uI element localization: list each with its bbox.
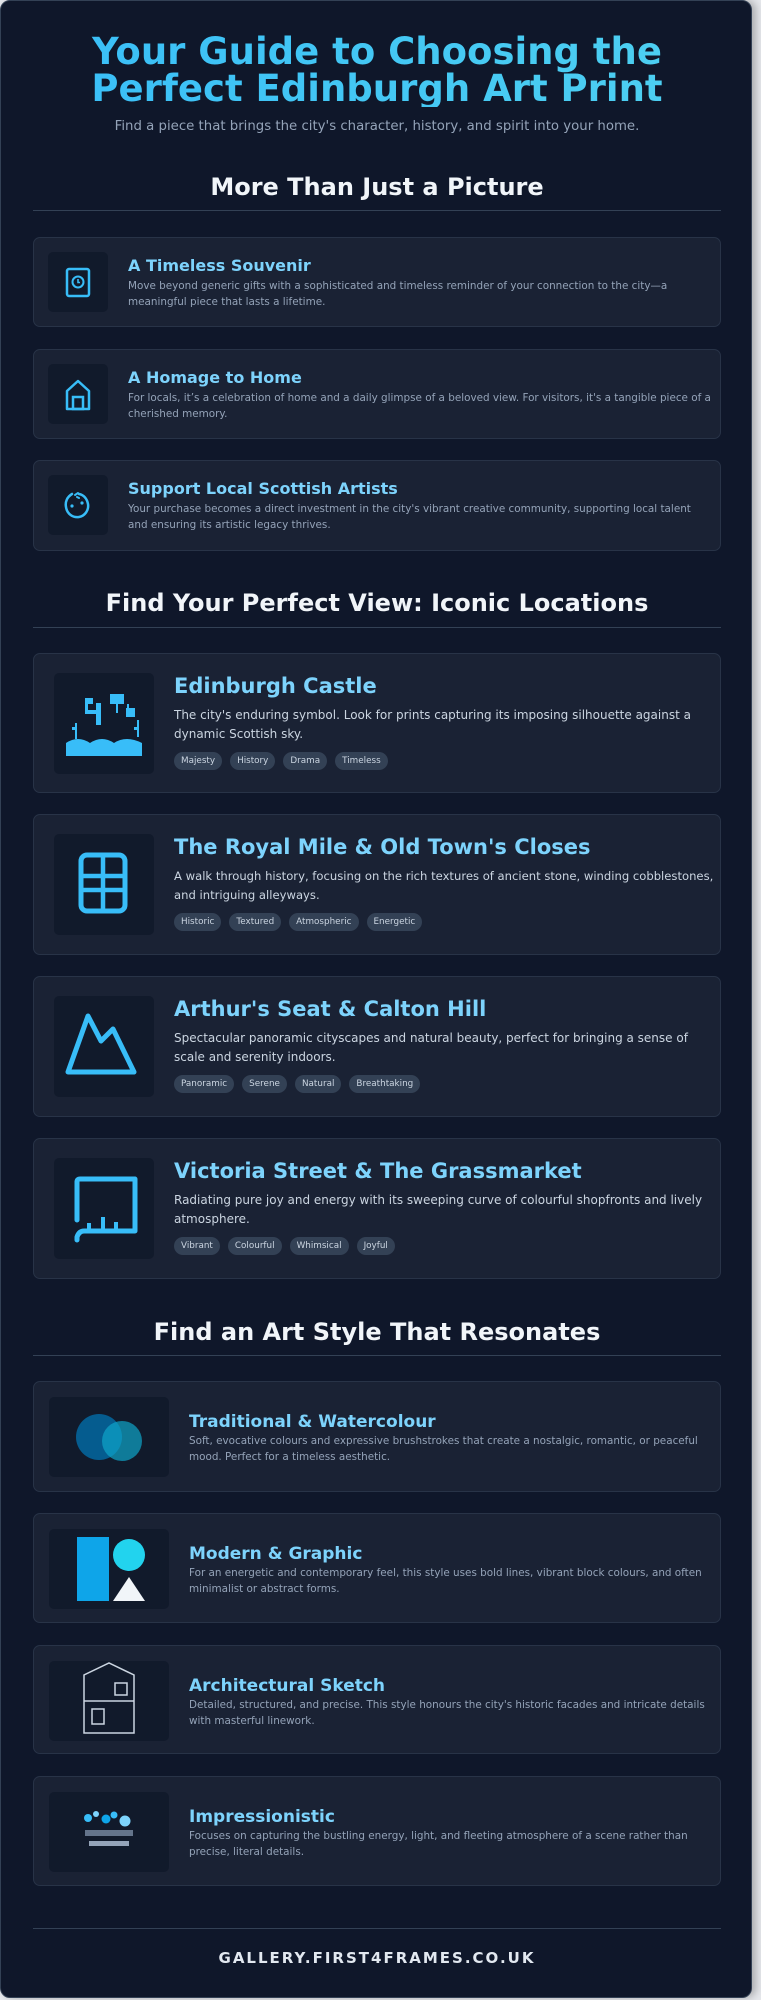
- tags: Textured: [236, 917, 274, 927]
- icon: window grid: [54, 834, 154, 935]
- description: The city's enduring symbol. Look for prints capturing its imposing silhouette against a dynamic Scottish sky.: [174, 708, 691, 741]
- icon: shapes: [49, 1529, 169, 1609]
- title: Your Guide to Choosing the: [92, 30, 662, 73]
- footer: GALLERY.FIRST4FRAMES.CO.UK: [219, 1949, 535, 1967]
- heading: Edinburgh Castle: [174, 674, 377, 698]
- icon: mountain: [54, 996, 154, 1097]
- icon: clock frame: [48, 252, 108, 312]
- tags: [174, 913, 422, 931]
- heading: The Royal Mile & Old Town's Closes: [174, 835, 590, 859]
- description: Your purchase becomes a direct investment in the city's vibrant creative community, supporting local talent and ensuring its artistic legacy thrives.: [128, 503, 691, 531]
- tags: [174, 752, 388, 770]
- description: A walk through history, focusing on the rich textures of ancient stone, winding cobblestones, and intriguing alleyways.: [174, 869, 713, 902]
- panel: architectural sketch: [33, 1645, 721, 1754]
- tags: Colourful: [235, 1241, 275, 1251]
- tags: Vibrant: [181, 1241, 213, 1251]
- description: Focuses on capturing the bustling energy, light, and fleeting atmosphere of a scene rather than precise, literal details.: [189, 1830, 688, 1858]
- heading: Arthur's Seat & Calton Hill: [174, 997, 486, 1021]
- description: Radiating pure joy and energy with its sweeping curve of colourful shopfronts and lively atmosphere.: [174, 1193, 702, 1226]
- panel: arthur's seat: [33, 976, 721, 1117]
- description: Move beyond generic gifts with a sophisticated and timeless reminder of your connection to the city—a meaningful piece that lasts a lifetime.: [128, 280, 667, 308]
- icon: overlapping circles: [49, 1397, 169, 1477]
- subtitle: Find a piece that brings the city's character, history, and spirit into your home.: [115, 119, 639, 134]
- tags: Whimsical: [297, 1241, 342, 1251]
- title: Perfect Edinburgh Art Print: [91, 67, 663, 110]
- tags: Atmospheric: [296, 917, 352, 927]
- description: For an energetic and contemporary feel, this style uses bold lines, vibrant block colours, and often minimalist or abstract forms.: [189, 1567, 702, 1595]
- panel: traditional watercolour: [33, 1381, 721, 1492]
- heading: Modern & Graphic: [189, 1544, 362, 1564]
- description: Soft, evocative colours and expressive brushstrokes that create a nostalgic, romantic, or peaceful mood. Perfect for a timeless aesthetic.: [189, 1435, 698, 1463]
- description: Detailed, structured, and precise. This style honours the city's historic facades and intricate details with masterful linework.: [189, 1699, 705, 1727]
- panel: edinburgh castle: [33, 653, 721, 793]
- tags: Energetic: [374, 917, 415, 927]
- icon: house: [48, 364, 108, 424]
- panel: homage to home: [33, 349, 721, 439]
- description: Spectacular panoramic cityscapes and natural beauty, perfect for bringing a sense of scale and serenity indoors.: [174, 1031, 688, 1064]
- description: For locals, it’s a celebration of home and a daily glimpse of a beloved view. For visitors, it's a tangible piece of a cherished memory.: [128, 392, 711, 420]
- heading: Architectural Sketch: [189, 1676, 385, 1696]
- tags: Panoramic: [181, 1079, 227, 1089]
- tags: History: [237, 756, 268, 766]
- heading: iconic locations: Find Your Perfect View: Iconic Locations: [106, 589, 648, 617]
- heading: more than just a picture: More Than Just a Picture: [210, 173, 544, 201]
- icon: shopfront bubble: [54, 1158, 154, 1259]
- panel: royal mile: [33, 814, 721, 955]
- icon: building sketch: [49, 1661, 169, 1741]
- tags: Serene: [249, 1079, 280, 1089]
- tags: Drama: [290, 756, 320, 766]
- heading: Support Local Scottish Artists: [128, 479, 398, 498]
- panel: timeless souvenir: [33, 237, 721, 327]
- heading: art style: Find an Art Style That Resonates: [154, 1318, 600, 1346]
- panel: impressionistic: [33, 1776, 721, 1886]
- tags: [174, 1075, 420, 1093]
- panel: victoria street: [33, 1138, 721, 1279]
- icon: dots and strokes: [49, 1792, 169, 1872]
- tags: Historic: [181, 917, 214, 927]
- icon: palette: [48, 475, 108, 535]
- title: [1, 33, 753, 107]
- tags: Breathtaking: [356, 1079, 413, 1089]
- tags: Majesty: [181, 756, 215, 766]
- heading: A Homage to Home: [128, 368, 302, 387]
- panel: support local artists: [33, 460, 721, 551]
- tags: Natural: [302, 1079, 334, 1089]
- heading: Victoria Street & The Grassmarket: [174, 1159, 582, 1183]
- tags: Joyful: [364, 1241, 388, 1251]
- heading: Traditional & Watercolour: [189, 1412, 436, 1432]
- heading: Impressionistic: [189, 1807, 335, 1827]
- heading: A Timeless Souvenir: [128, 256, 311, 275]
- tags: [174, 1237, 395, 1255]
- panel: modern graphic: [33, 1513, 721, 1623]
- icon: castle: [54, 673, 154, 774]
- tags: Timeless: [342, 756, 381, 766]
